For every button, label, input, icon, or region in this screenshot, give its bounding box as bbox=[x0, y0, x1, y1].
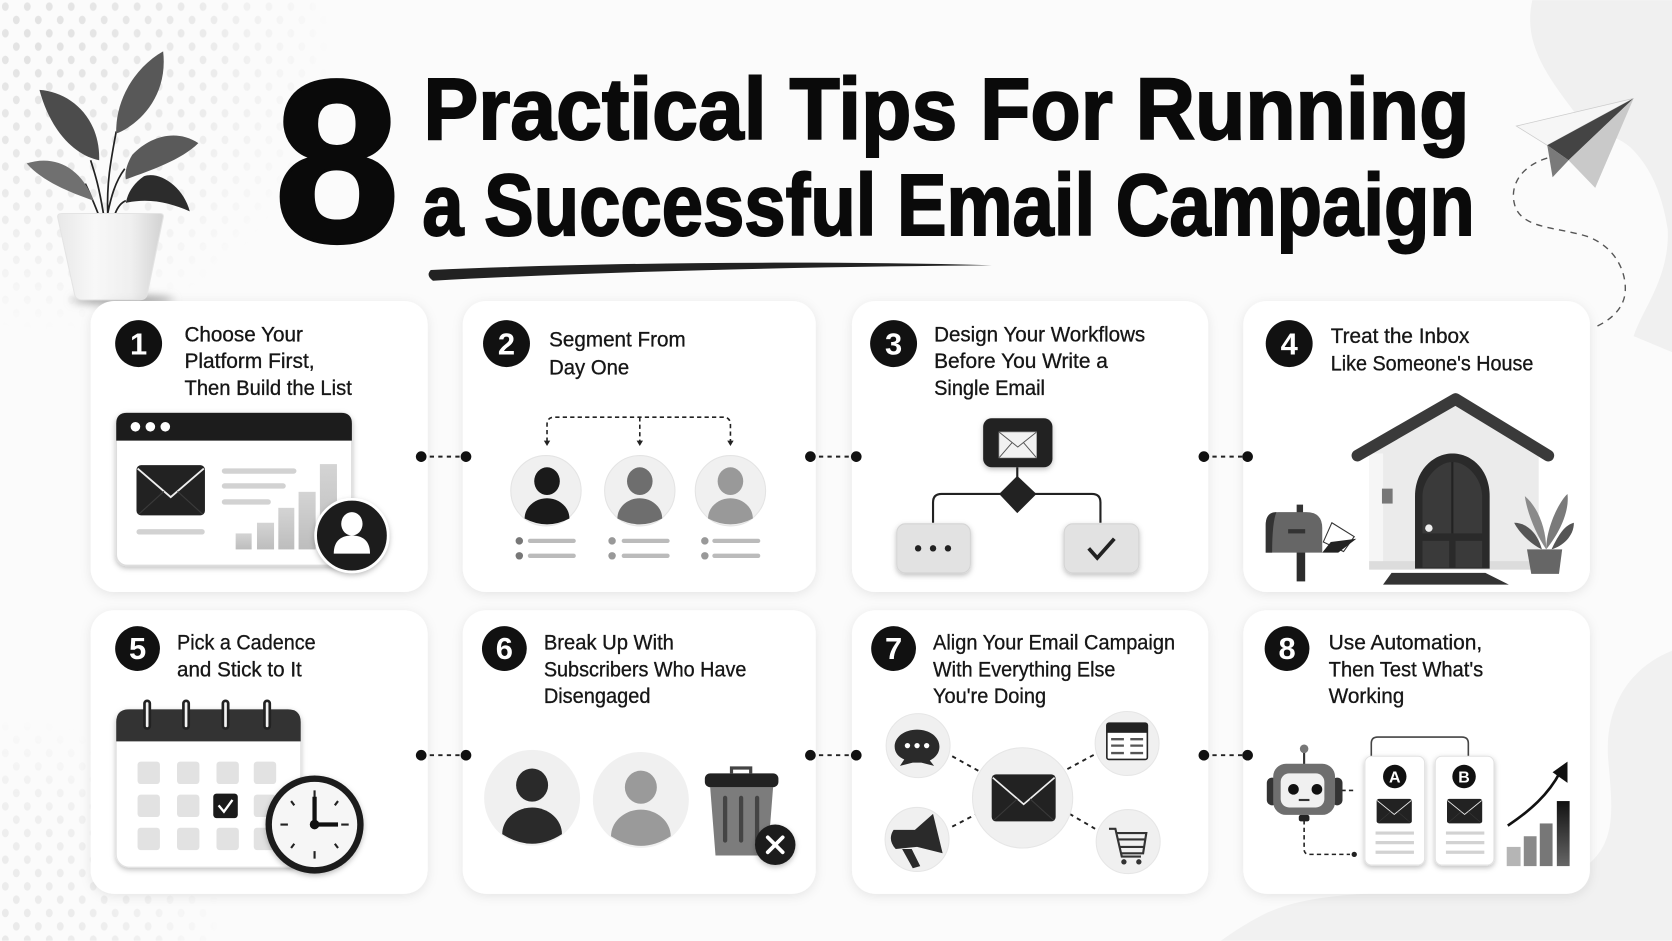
title bbox=[274, 33, 1475, 291]
dashed hub connectors bbox=[952, 754, 1095, 829]
icon: browser window bbox=[116, 413, 352, 565]
heading tip 6: Subscribers Who Have bbox=[544, 657, 746, 681]
heading tip 8: Then Test What's bbox=[1329, 657, 1483, 681]
variant B card bbox=[1435, 756, 1494, 865]
workflow email node bbox=[983, 418, 1052, 467]
connector 2 to 3 bbox=[805, 451, 862, 462]
large numeral 8: 8 bbox=[274, 33, 400, 291]
workflow wait node bbox=[897, 524, 970, 573]
central email hub bbox=[972, 748, 1073, 848]
background blob bottom right bbox=[1221, 651, 1672, 941]
heading tip 1: Platform First, bbox=[184, 349, 315, 373]
workflow check node bbox=[1064, 524, 1139, 573]
heading tip 5: and Stick to It bbox=[177, 657, 302, 681]
workflow connectors bbox=[933, 467, 1100, 523]
panel: tip 1 bbox=[91, 301, 428, 592]
heading tip 6: Disengaged bbox=[544, 684, 650, 708]
heading tip 2: Segment From bbox=[549, 327, 686, 351]
panel: tip 7 bbox=[852, 610, 1208, 894]
number badge 5 bbox=[115, 626, 160, 671]
plane wings bbox=[1516, 98, 1634, 145]
leaf far left bbox=[27, 161, 94, 201]
heading tip 8: Working bbox=[1329, 684, 1404, 708]
background dot pattern bottom left bbox=[2, 778, 161, 940]
card 3 bbox=[852, 301, 1208, 592]
leaf right bbox=[125, 135, 198, 179]
icon: mailbox bbox=[1266, 505, 1356, 581]
heading tip 2: Day One bbox=[549, 356, 629, 380]
heading tip 7 bbox=[933, 631, 1175, 708]
plant stems bbox=[85, 131, 126, 214]
icon: calendar bbox=[116, 701, 301, 867]
diagram: dashed segment tree bbox=[544, 417, 734, 446]
heading tip 7: You're Doing bbox=[933, 684, 1046, 708]
heading tip 8: Use Automation, bbox=[1329, 631, 1482, 655]
leaf lower right bbox=[126, 175, 190, 211]
dashed trail bbox=[1513, 158, 1625, 327]
card 6 bbox=[463, 610, 816, 894]
icon: clock bbox=[269, 779, 360, 870]
icon: web page bbox=[1095, 711, 1159, 775]
heading tip 2 bbox=[549, 327, 686, 380]
number badge 7: 7 bbox=[885, 631, 902, 666]
icon: shopping cart bbox=[1096, 810, 1160, 874]
dashed robot connectors bbox=[1304, 790, 1356, 854]
heading tip 1: Choose Your bbox=[184, 322, 303, 346]
connector 3 to 4 bbox=[1199, 451, 1253, 462]
heading tip 3: Single Email bbox=[934, 376, 1045, 400]
number badge 6 bbox=[482, 626, 527, 671]
card 4 bbox=[1243, 301, 1590, 592]
plant illustration bbox=[27, 51, 198, 304]
background dot pattern top left bbox=[2, 2, 268, 264]
heading tip 3: Design Your Workflows bbox=[934, 322, 1145, 346]
panel: tip 6 bbox=[463, 610, 816, 894]
segment avatar mid bbox=[605, 456, 675, 560]
icon: potted plant bbox=[1514, 494, 1574, 574]
number badge 6: 6 bbox=[496, 631, 513, 666]
title line 1: Practical Tips For Running bbox=[423, 60, 1469, 158]
heading tip 3 bbox=[934, 322, 1145, 400]
avatar disengaged bbox=[593, 752, 689, 848]
variant A card: A bbox=[1389, 769, 1401, 786]
card 5 bbox=[91, 610, 428, 894]
panel: tip 2 bbox=[463, 301, 816, 592]
heading tip 8 bbox=[1329, 631, 1483, 708]
connector 7 to 8 bbox=[1199, 750, 1253, 761]
workflow decision diamond bbox=[999, 476, 1036, 513]
leaf left bbox=[39, 90, 99, 160]
number badge 8: 8 bbox=[1278, 631, 1296, 666]
pot ground shadow bbox=[71, 296, 174, 304]
heading tip 6: Break Up With bbox=[544, 631, 674, 655]
heading tip 5 bbox=[177, 631, 316, 681]
heading tip 4 bbox=[1331, 324, 1533, 375]
panel: tip 4 bbox=[1243, 301, 1590, 592]
number badge 4 bbox=[1266, 320, 1313, 367]
bar chart with rising arrow bbox=[1507, 762, 1570, 866]
icon: house bbox=[1357, 399, 1548, 585]
card 1 bbox=[91, 301, 428, 592]
heading tip 7: Align Your Email Campaign bbox=[933, 631, 1175, 655]
number badge 1 bbox=[115, 320, 162, 367]
card 7 bbox=[852, 610, 1208, 894]
background blob top right bbox=[1530, 0, 1672, 352]
icon: megaphone bbox=[885, 807, 949, 871]
heading tip 4: Like Someone's House bbox=[1331, 351, 1533, 375]
number badge 2: 2 bbox=[498, 326, 515, 361]
number badge 2 bbox=[483, 320, 530, 367]
panel: tip 3 bbox=[852, 301, 1208, 592]
icon: chat bubble bbox=[886, 714, 950, 778]
avatar engaged bbox=[484, 750, 580, 846]
paper plane with dashed trail bbox=[1513, 98, 1634, 327]
segment avatar light bbox=[695, 456, 766, 560]
connector 1 to 2 bbox=[416, 451, 471, 462]
heading tip 7: With Everything Else bbox=[933, 657, 1115, 681]
number badge 7 bbox=[871, 626, 916, 671]
variant B card: B bbox=[1458, 769, 1470, 786]
number badge 1: 1 bbox=[130, 326, 147, 361]
segment avatar dark bbox=[511, 456, 581, 560]
heading tip 5: Pick a Cadence bbox=[177, 631, 316, 655]
heading tip 6 bbox=[544, 631, 746, 708]
icon: robot bbox=[1267, 745, 1343, 821]
title underline brush stroke bbox=[429, 263, 992, 281]
heading tip 1 bbox=[184, 322, 352, 400]
title line 2: a Successful Email Campaign bbox=[422, 156, 1475, 254]
number badge 5: 5 bbox=[129, 631, 146, 666]
number badge 3 bbox=[870, 320, 917, 367]
panel: tip 5 bbox=[91, 610, 428, 894]
heading tip 3: Before You Write a bbox=[934, 349, 1108, 373]
card 8 bbox=[1243, 610, 1590, 894]
number badge 4: 4 bbox=[1281, 326, 1299, 361]
heading tip 4: Treat the Inbox bbox=[1331, 324, 1470, 348]
pot bbox=[58, 214, 163, 300]
icon: remove badge bbox=[755, 825, 795, 865]
variant A card bbox=[1365, 756, 1425, 865]
heading tip 1: Then Build the List bbox=[184, 376, 352, 400]
icon: trash can bbox=[705, 768, 778, 855]
connector 6 to 7 bbox=[805, 750, 862, 761]
connector 5 to 6 bbox=[416, 750, 471, 761]
card 2 bbox=[463, 301, 816, 592]
icon: user badge bbox=[316, 499, 388, 572]
number badge 8 bbox=[1265, 626, 1309, 671]
leaf tall bbox=[116, 51, 164, 134]
number badge 3: 3 bbox=[885, 326, 902, 361]
panel: tip 8 bbox=[1243, 610, 1590, 894]
test bracket bbox=[1371, 737, 1468, 756]
